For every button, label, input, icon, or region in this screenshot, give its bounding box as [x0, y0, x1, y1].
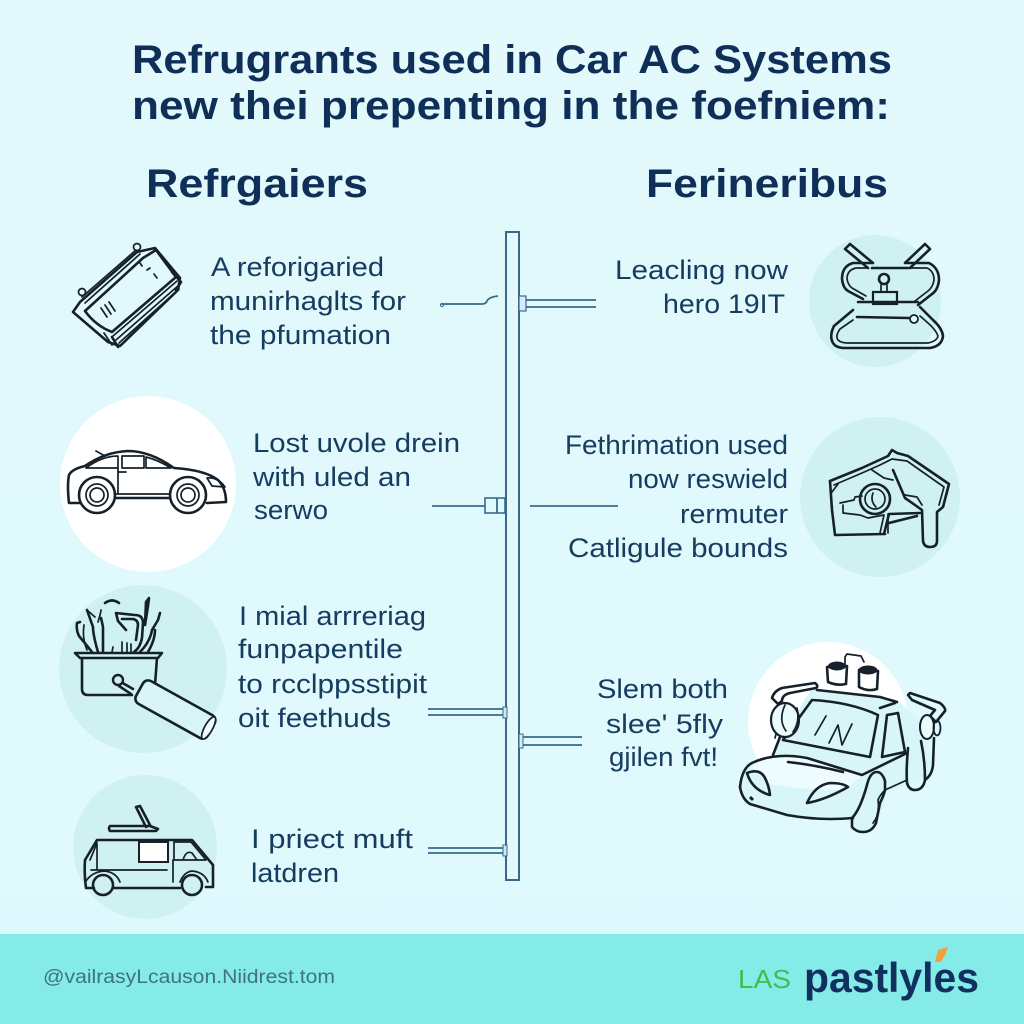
central vertical pipe	[506, 232, 519, 880]
text: left item 3: funpapentile	[238, 634, 403, 664]
text: left item 2: serwo	[254, 495, 328, 525]
icon: cartoon car in white circle	[740, 642, 945, 832]
text: left item 3: to rcclppsstipit	[238, 669, 428, 699]
text: right item 3: slee' 5fly	[606, 709, 724, 739]
text: left item 3: I mial arrreriag	[239, 601, 426, 631]
text: right item 1	[615, 255, 789, 319]
text: left item 2: with uled an	[252, 462, 411, 492]
text: left item 4	[251, 824, 414, 888]
icon: van	[73, 775, 217, 919]
text: right item 1: Leacling now	[615, 255, 789, 285]
text: left item 3	[238, 601, 428, 733]
text: left item 4: I priect muft	[251, 824, 414, 854]
text: right item 2: now reswield	[628, 464, 788, 494]
icon: compressor loops	[809, 235, 943, 367]
connector: left row 1	[440, 296, 498, 307]
text: left item 1	[210, 252, 406, 350]
title: Refrugrants used in Car AC Systems	[132, 38, 892, 82]
logo: LAS	[738, 964, 791, 994]
text: right item 3: Slem both	[597, 674, 728, 704]
text: left item 3: oit feethuds	[238, 703, 391, 733]
text: right item 2: rermuter	[680, 499, 788, 529]
text: right item 3	[597, 674, 728, 772]
logo: pastlyles	[804, 954, 979, 1001]
text: left item 1: the pfumation	[210, 320, 391, 350]
footer url: @vailrasyLcauson.Niidrest.tom	[43, 967, 335, 988]
text: right item 1: hero 19IT	[663, 289, 785, 319]
connector: left row 3	[428, 707, 507, 718]
icon: plant pot with cylinder	[59, 585, 227, 753]
logo	[738, 947, 979, 1001]
text: left item 2	[252, 428, 460, 525]
title	[132, 38, 892, 128]
text: right item 2: Fethrimation used	[565, 430, 788, 460]
footer band	[0, 934, 1024, 1024]
icon: car in white circle	[60, 396, 236, 572]
text: left item 1: A reforigaried	[211, 252, 384, 282]
connector: right row 2	[530, 505, 618, 507]
text: left item 2: Lost uvole drein	[253, 428, 460, 458]
connector: right row 3	[519, 734, 582, 748]
text: left item 4: latdren	[251, 858, 339, 888]
text: right item 2	[565, 430, 788, 563]
connector: left row 2	[432, 498, 505, 513]
connector: right row 1	[519, 296, 596, 311]
text: right item 3: gjilen fvt!	[609, 742, 718, 772]
heading: right column: Ferineribus	[646, 162, 888, 206]
icon: engine block	[800, 417, 960, 577]
heading: left column: Refrgaiers	[146, 162, 368, 206]
logo leaf	[935, 947, 948, 962]
title: new thei prepenting in the foefniem:	[132, 84, 890, 128]
connector: left row 4	[428, 845, 507, 856]
icon: radiator	[73, 244, 181, 347]
text: right item 2: Catligule bounds	[568, 533, 788, 563]
text: left item 1: munirhaglts for	[210, 286, 406, 316]
